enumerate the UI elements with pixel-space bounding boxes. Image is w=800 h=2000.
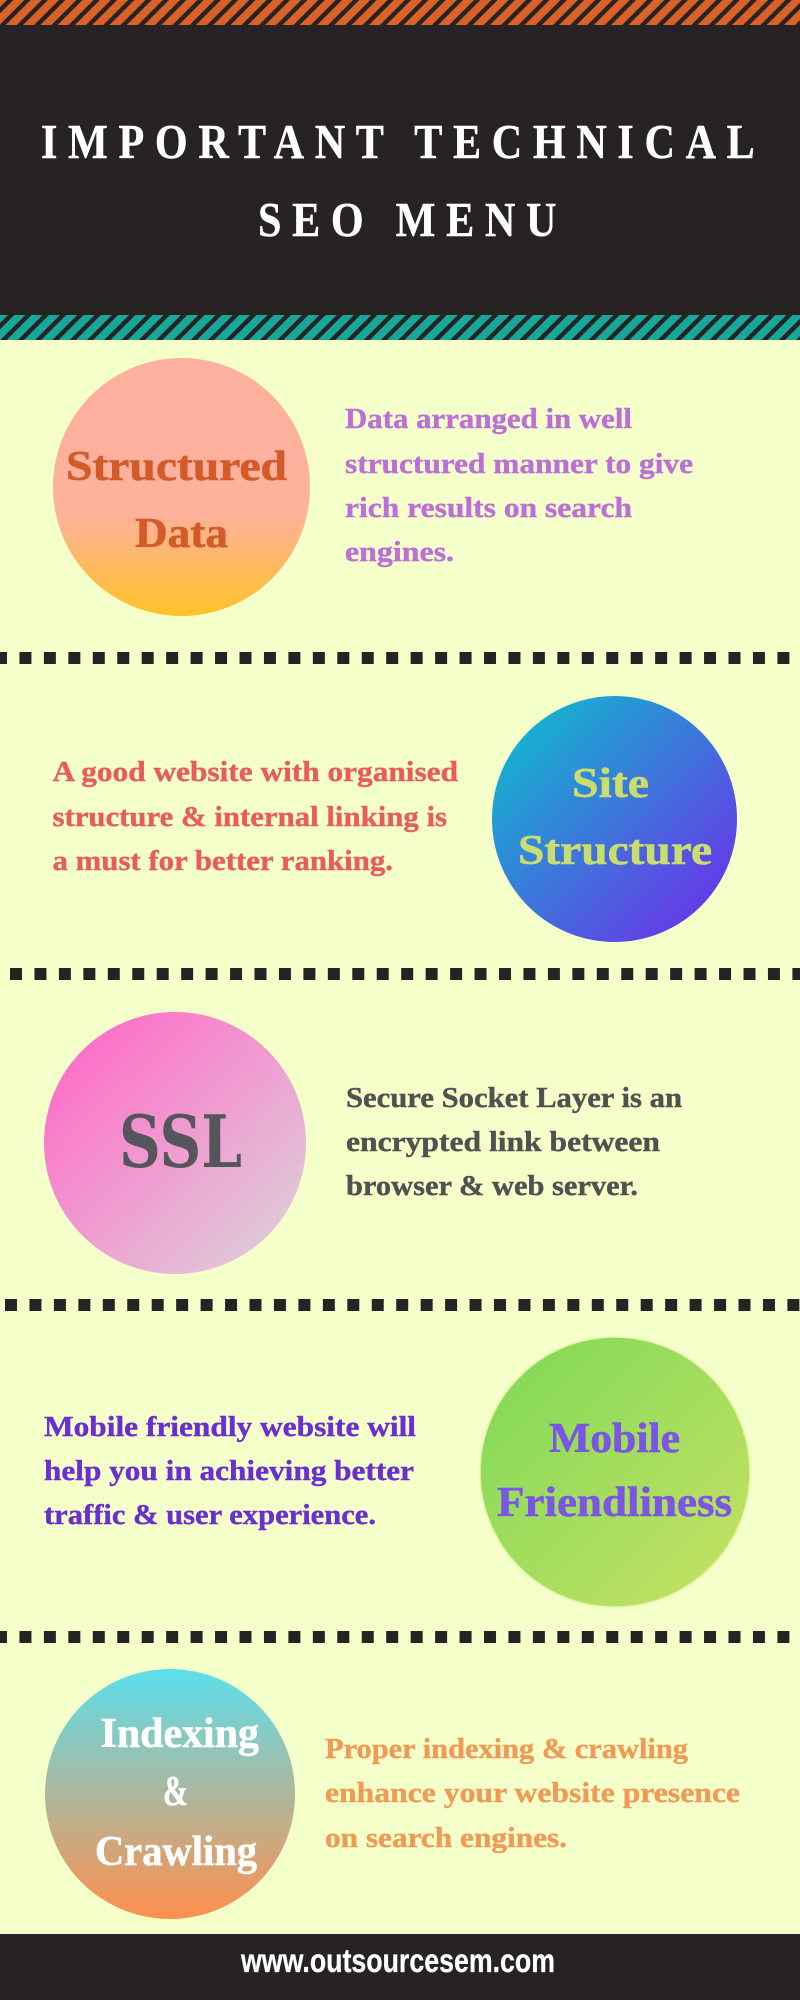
heading: indexing and crawling: Crawling	[95, 1829, 257, 1875]
heading: mobile friendliness: Mobile	[549, 1416, 680, 1462]
heading: site structure: Site	[572, 761, 649, 807]
description: structured data: Data arranged in well	[345, 403, 632, 435]
heading: structured data: Structured	[66, 444, 287, 490]
description: mobile friendliness: help you in achieving better	[44, 1455, 414, 1487]
title: SEO MENU	[258, 192, 556, 247]
description: mobile friendliness	[44, 1411, 416, 1531]
header dark panel	[0, 25, 800, 315]
description: ssl: browser & web server.	[346, 1170, 638, 1202]
heading: ssl: SSL	[119, 1099, 242, 1184]
description: structured data: rich results on search	[345, 492, 632, 524]
description: structured data: structured manner to give	[345, 448, 693, 480]
panel: indexing and crawling	[45, 1669, 740, 1919]
panel: mobile friendliness	[44, 1337, 750, 1607]
teal striped bottom border	[0, 315, 800, 340]
heading: site structure	[518, 761, 712, 874]
description: indexing and crawling: on search engines.	[325, 1822, 567, 1854]
heading: indexing and crawling: &	[163, 1769, 188, 1815]
footer background	[0, 1934, 800, 2000]
divider	[0, 1631, 800, 1643]
heading: indexing and crawling: Indexing	[100, 1711, 259, 1757]
panel: structured data	[53, 358, 693, 616]
description: ssl: encrypted link between	[346, 1126, 660, 1158]
description: indexing and crawling	[325, 1733, 740, 1854]
description: indexing and crawling: Proper indexing & crawling	[325, 1733, 689, 1765]
title: IMPORTANT TECHNICAL	[41, 114, 755, 169]
circle: indexing and crawling	[45, 1669, 295, 1919]
divider	[0, 968, 800, 980]
description: mobile friendliness: traffic & user experience.	[44, 1499, 376, 1531]
heading: structured data	[66, 444, 287, 557]
description: site structure: A good website with organised	[52, 756, 458, 788]
orange striped top border	[0, 0, 800, 25]
description: site structure: structure & internal linking is	[52, 801, 447, 833]
circle: mobile friendliness	[480, 1337, 750, 1607]
description: ssl: Secure Socket Layer is an	[346, 1082, 682, 1114]
description: ssl	[346, 1082, 682, 1202]
description: site structure	[52, 756, 458, 877]
footer band	[0, 1934, 800, 2000]
description: mobile friendliness: Mobile friendly website will	[44, 1411, 416, 1443]
divider	[0, 652, 800, 664]
heading: indexing and crawling	[95, 1711, 259, 1875]
heading: structured data: Data	[135, 511, 228, 557]
description: indexing and crawling: enhance your website presence	[325, 1777, 740, 1809]
heading: site structure: Structure	[518, 828, 712, 874]
divider	[0, 1299, 800, 1311]
header band	[0, 0, 800, 340]
heading: mobile friendliness: Friendliness	[497, 1480, 732, 1526]
title	[41, 114, 755, 247]
panel: site structure	[52, 696, 737, 942]
circle: site structure	[492, 696, 737, 942]
footer url: www.outsourcesem.com	[240, 1942, 555, 1979]
panel: ssl	[44, 1012, 682, 1274]
description: structured data	[345, 403, 693, 568]
description: structured data: engines.	[345, 536, 454, 568]
circle: structured data	[53, 358, 310, 616]
circle: ssl	[44, 1012, 306, 1274]
description: site structure: a must for better ranking.	[52, 845, 393, 877]
heading: mobile friendliness	[497, 1416, 732, 1526]
